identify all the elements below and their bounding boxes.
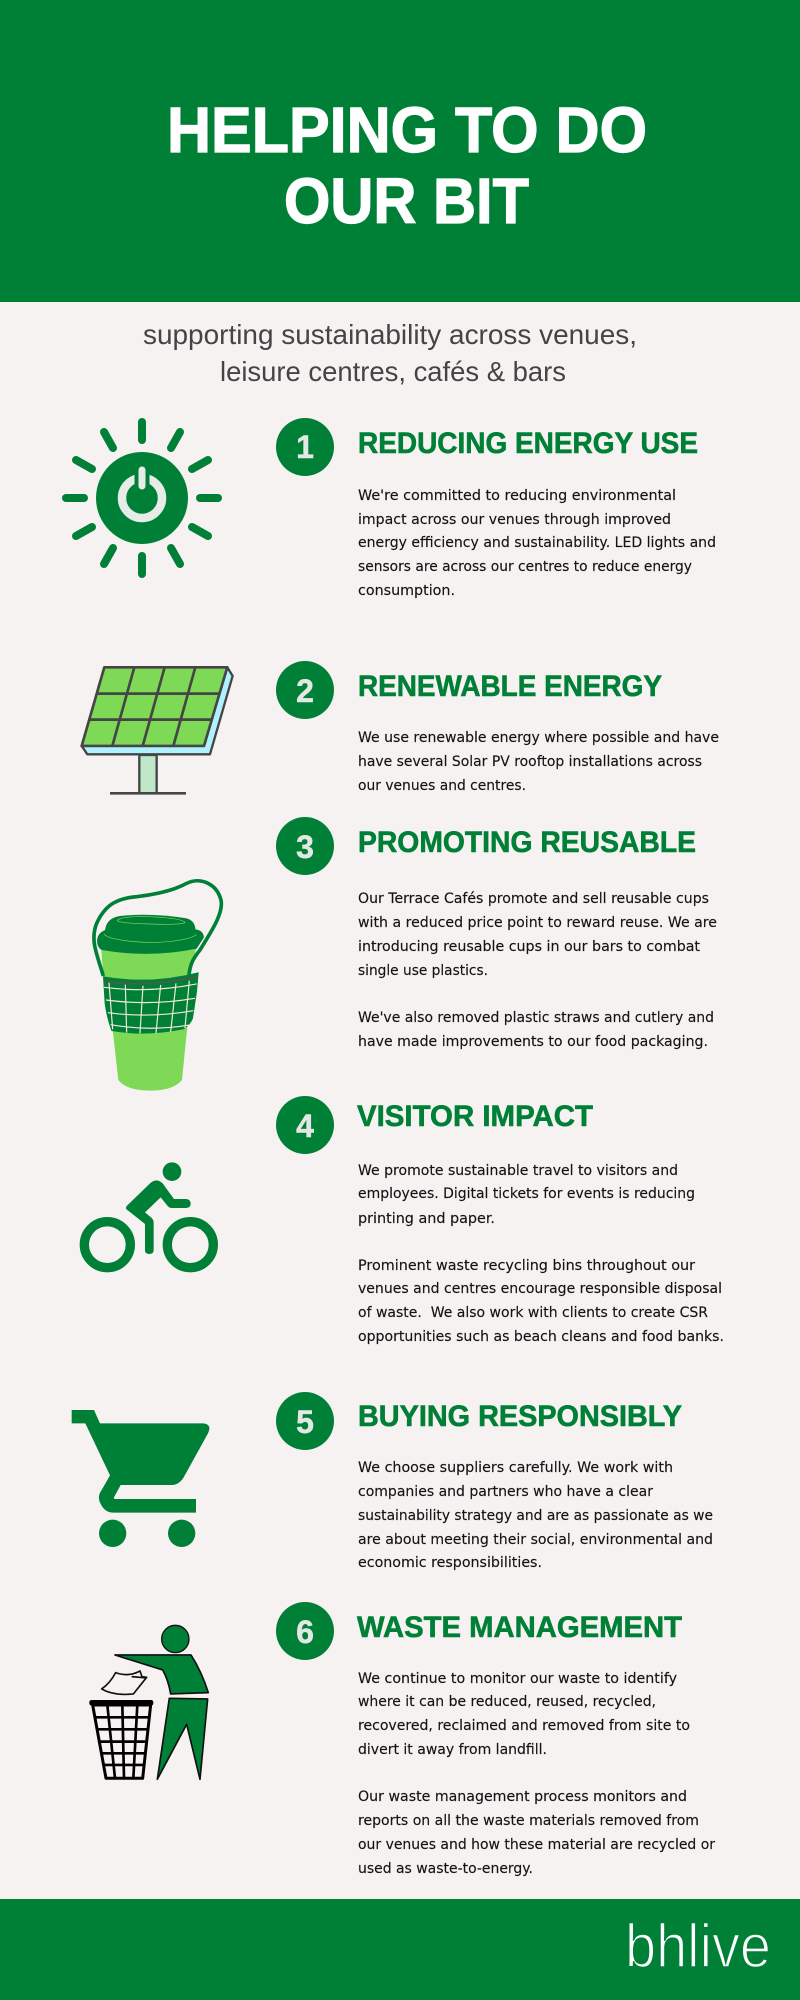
text block: buying responsibly: are about meeting their social, environmental and: [358, 1532, 713, 1548]
heading: visitor impact: VISITOR IMPACT: [357, 1100, 593, 1133]
text block: waste management: divert it away from landfill.: [358, 1742, 547, 1758]
text block: buying responsibly: We choose suppliers carefully. We work with: [358, 1460, 673, 1476]
number badge 4: 4: [296, 1108, 314, 1144]
heading: reducing energy use: REDUCING ENERGY USE: [358, 427, 698, 460]
text block: promoting reusable: Our Terrace Cafés promote and sell reusable cups: [358, 891, 709, 907]
icon: person putting litter in bin: [89, 1625, 208, 1779]
heading: promoting reusable: PROMOTING REUSABLE: [358, 826, 696, 859]
number badge 5: [276, 1392, 334, 1450]
heading: buying responsibly: BUYING RESPONSIBLY: [358, 1400, 682, 1433]
icon: shopping cart: [72, 1410, 209, 1547]
text block: buying responsibly: sustainability strategy and are as passionate as we: [358, 1508, 713, 1524]
number badge 6: 6: [296, 1614, 314, 1650]
icon: cyclist: [84, 1162, 213, 1268]
text block: visitor impact: [358, 1163, 724, 1345]
text block: renewable energy: our venues and centres.: [358, 778, 526, 794]
title: [167, 94, 647, 237]
number badge 2: [276, 661, 334, 719]
text block: reducing energy use: sensors are across our centres to reduce energy: [358, 559, 692, 575]
text block: waste management: [358, 1671, 715, 1877]
text block: reducing energy use: [358, 488, 716, 599]
number badge 3: [276, 817, 334, 875]
text block: promoting reusable: single use plastics.: [358, 963, 488, 979]
text block: promoting reusable: have made improvements to our food packaging.: [358, 1034, 708, 1050]
text block: reducing energy use: energy efficiency and sustainability. LED lights and: [358, 535, 716, 551]
text block: waste management: our venues and how these material are recycled or: [358, 1837, 715, 1853]
text block: promoting reusable: introducing reusable cups in our bars to combat: [358, 939, 700, 955]
text block: visitor impact: printing and paper.: [358, 1211, 495, 1227]
text block: waste management: We continue to monitor our waste to identify: [358, 1671, 677, 1687]
logo: bhlive: bhlive: [625, 1912, 771, 1980]
text block: buying responsibly: [358, 1460, 713, 1571]
heading: renewable energy: RENEWABLE ENERGY: [358, 670, 662, 703]
number badge 1: 1: [296, 429, 314, 465]
text block: promoting reusable: We've also removed plastic straws and cutlery and: [358, 1010, 714, 1026]
subtitle: supporting sustainability across venues,: [143, 319, 637, 350]
text block: reducing energy use: impact across our venues through improved: [358, 512, 671, 528]
subtitle: [143, 319, 637, 387]
number badge 6: [276, 1602, 334, 1660]
icon: solar panel: [82, 667, 233, 793]
title: HELPING TO DO: [167, 94, 647, 166]
text block: visitor impact: employees. Digital tickets for events is reducing: [358, 1186, 695, 1202]
text block: visitor impact: venues and centres encourage responsible disposal: [358, 1281, 722, 1297]
text block: visitor impact: We promote sustainable travel to visitors and: [358, 1163, 678, 1179]
text block: renewable energy: have several Solar PV rooftop installations across: [358, 754, 702, 770]
number badge 3: 3: [296, 829, 314, 865]
text block: reducing energy use: We're committed to reducing environmental: [358, 488, 676, 504]
text block: buying responsibly: companies and partners who have a clear: [358, 1484, 653, 1500]
text block: waste management: recovered, reclaimed and removed from site to: [358, 1718, 690, 1734]
subtitle: leisure centres, cafés & bars: [220, 356, 566, 387]
text block: reducing energy use: consumption.: [358, 583, 455, 599]
icon: sun with power button: [66, 422, 218, 574]
text block: waste management: used as waste-to-energy.: [358, 1861, 533, 1877]
text block: buying responsibly: economic responsibilities.: [358, 1555, 542, 1571]
text block: promoting reusable: [358, 891, 717, 1050]
text block: waste management: Our waste management process monitors and: [358, 1789, 687, 1805]
icon: reusable cup: [94, 881, 221, 1091]
title: OUR BIT: [284, 165, 529, 237]
number badge 4: [276, 1096, 334, 1154]
number badge 2: 2: [296, 673, 314, 709]
text block: waste management: where it can be reduced, reused, recycled,: [358, 1694, 656, 1710]
text block: visitor impact: Prominent waste recycling bins throughout our: [358, 1258, 695, 1274]
number badge 1: [276, 418, 334, 476]
text block: visitor impact: of waste. We also work with clients to create CSR: [358, 1305, 708, 1321]
text block: promoting reusable: with a reduced price point to reward reuse. We are: [358, 915, 717, 931]
text block: visitor impact: opportunities such as beach cleans and food banks.: [358, 1329, 724, 1345]
text block: renewable energy: We use renewable energy where possible and have: [358, 730, 719, 746]
text block: renewable energy: [358, 730, 719, 794]
heading: waste management: WASTE MANAGEMENT: [357, 1611, 682, 1644]
number badge 5: 5: [296, 1404, 314, 1440]
footer band: [0, 1899, 800, 2000]
header band: [0, 0, 800, 302]
text block: waste management: reports on all the waste materials removed from: [358, 1813, 699, 1829]
